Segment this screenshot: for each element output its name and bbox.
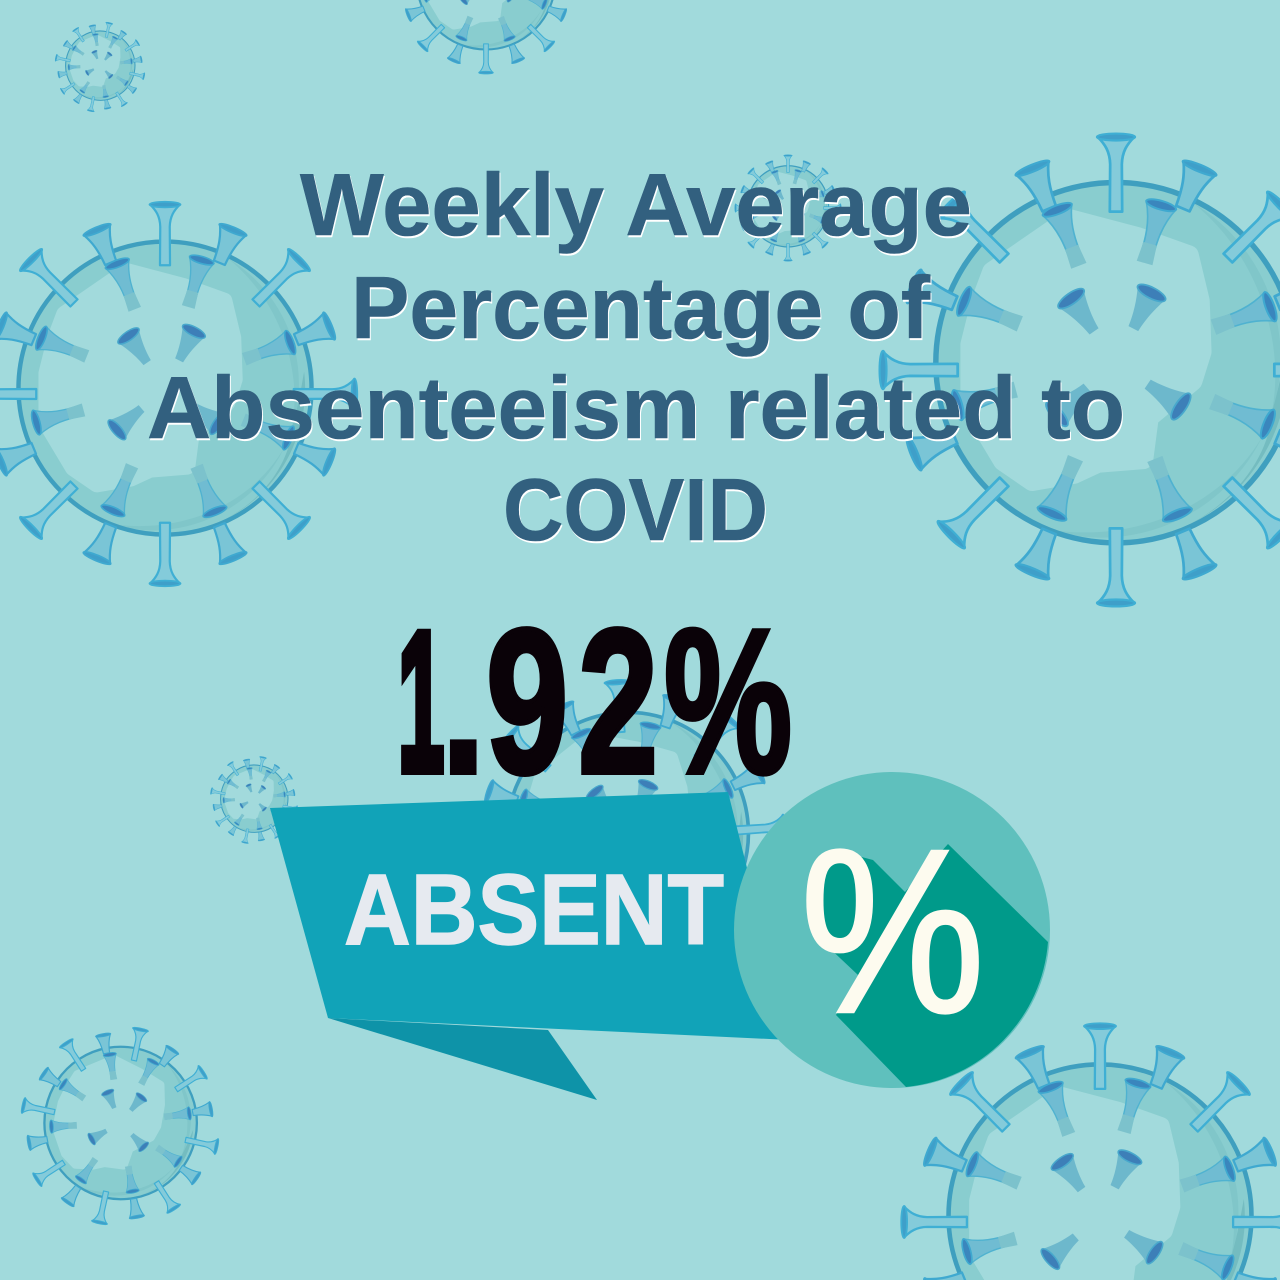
- icon: medium virus bottom left: [1, 1007, 239, 1245]
- icon: cropped virus top center: [395, 0, 577, 74]
- big percentage value: 1: [398, 593, 444, 813]
- badge circle: [734, 772, 1050, 1088]
- title: [147, 155, 1125, 559]
- icon: large virus right: [880, 134, 1280, 606]
- big percentage value: .: [441, 587, 486, 817]
- percent badge: [734, 772, 1050, 1088]
- big percentage value: 9: [486, 588, 568, 817]
- title: COVID: [503, 460, 768, 559]
- banner label: ABSENT: [344, 854, 724, 966]
- big percentage value: 2: [578, 586, 658, 817]
- ribbon body: [270, 792, 790, 1040]
- icon: small virus behind title: [735, 155, 841, 261]
- icon: small virus top left: [46, 13, 154, 121]
- icon: small virus near banner: [202, 748, 306, 852]
- title: Percentage of: [351, 258, 931, 357]
- icon: large virus bottom right: [901, 1023, 1280, 1280]
- ribbon tail: [328, 1018, 597, 1100]
- big percentage value: %: [664, 586, 792, 817]
- badge long shadow: [815, 844, 1048, 1087]
- badge percent sign: %: [800, 800, 985, 1062]
- title: Weekly Average: [300, 155, 972, 254]
- big percentage value: [398, 586, 792, 817]
- title: Absenteeism related to: [147, 358, 1125, 457]
- banner ribbon with label: [270, 792, 790, 1100]
- icon: large virus left: [0, 202, 357, 586]
- icon: virus behind percentage: [459, 669, 797, 1007]
